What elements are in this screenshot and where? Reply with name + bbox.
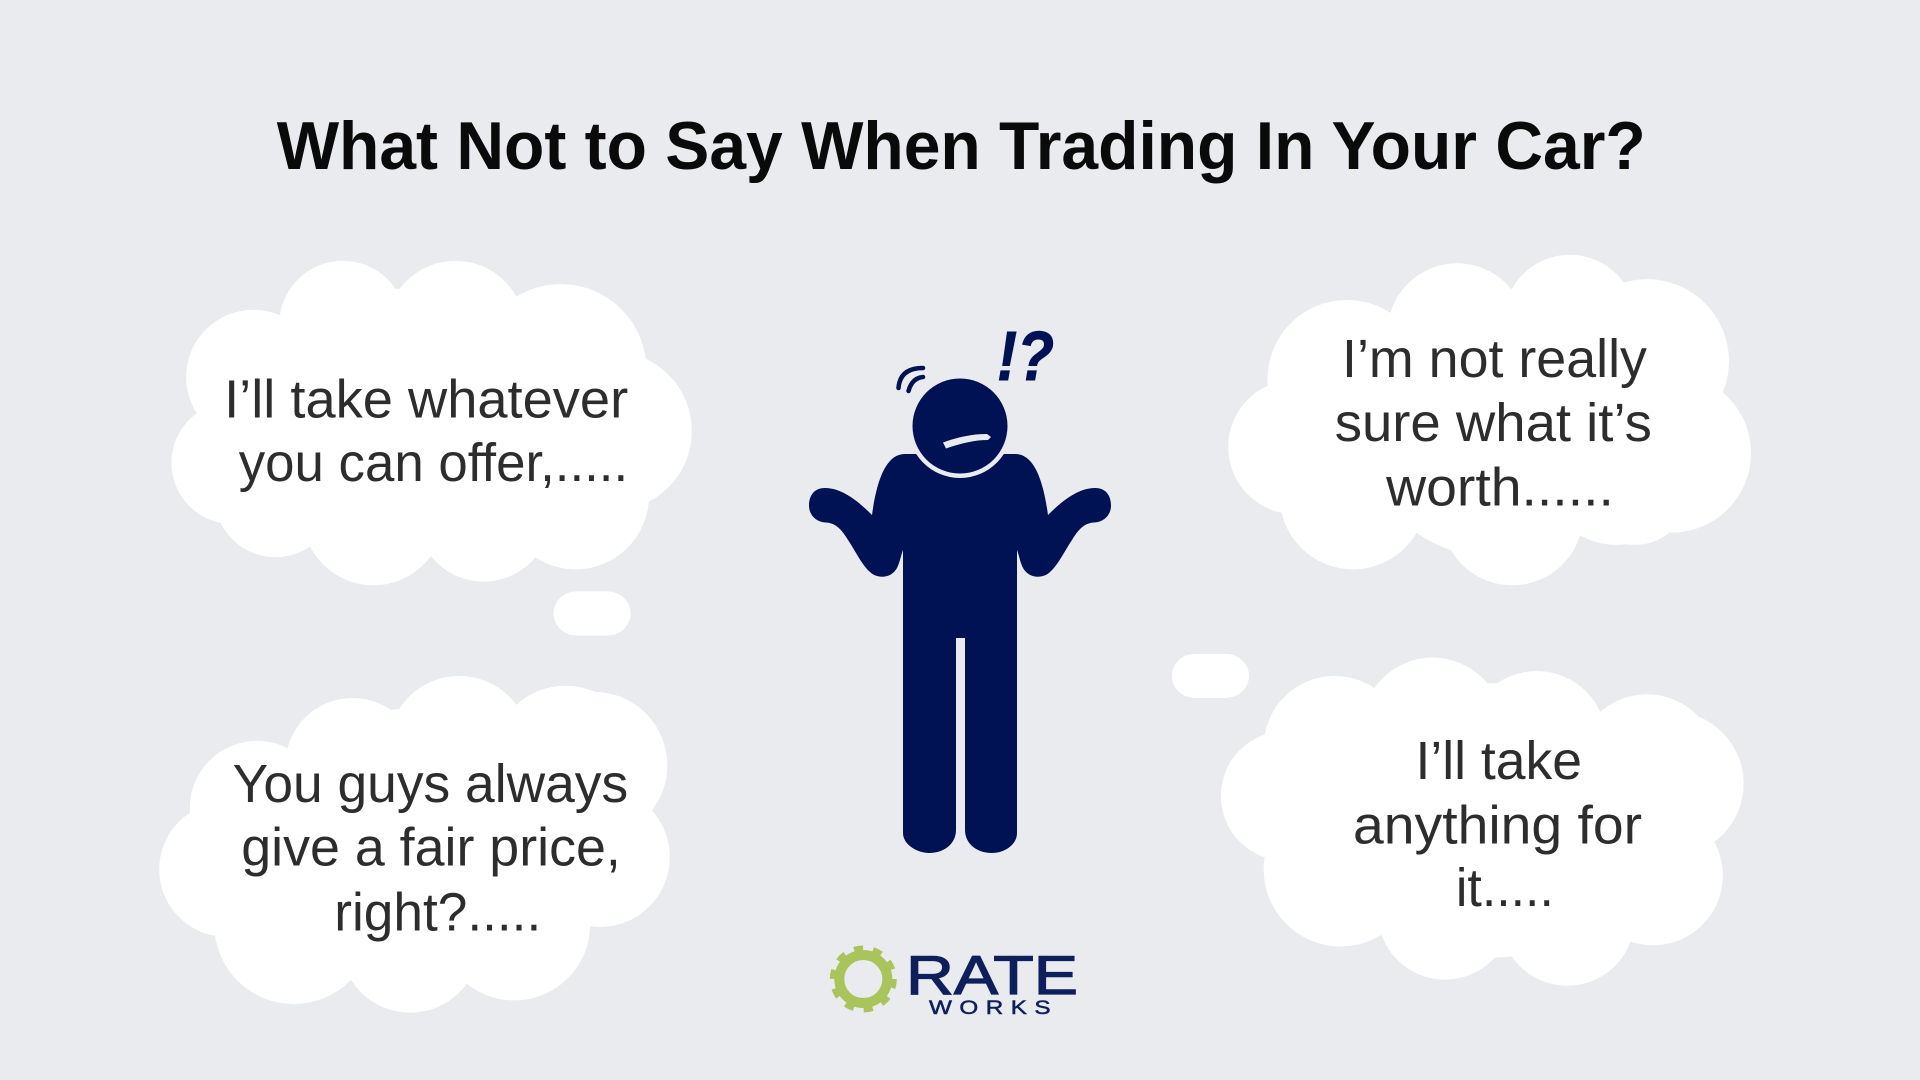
small thought bubble right xyxy=(1172,654,1249,698)
panel: thought cloud top left: you can offer,..... xyxy=(239,433,628,493)
panel: thought cloud top right xyxy=(1228,255,1751,585)
panel: thought cloud top right: I’m not really xyxy=(1342,329,1647,389)
logo: Rate Works: RATE xyxy=(906,944,1078,1006)
icon: confused shrugging person xyxy=(809,317,1111,853)
icon: green gear xyxy=(833,949,893,1009)
panel: thought cloud top left xyxy=(171,261,692,585)
panel: thought cloud bottom right: I’ll take xyxy=(1416,731,1582,791)
logo: Rate Works xyxy=(833,944,1078,1019)
panel: thought cloud bottom left: give a fair price, xyxy=(241,818,621,878)
panel: thought cloud top right: worth...... xyxy=(1385,458,1614,518)
panel: thought cloud top left: I’ll take whatever xyxy=(224,370,628,430)
title: What Not to Say When Trading In Your Car? xyxy=(277,109,1646,184)
panel: thought cloud bottom left xyxy=(159,676,670,1013)
logo: Rate Works: WORKS xyxy=(929,997,1058,1019)
small thought bubble left xyxy=(553,591,631,636)
panel: thought cloud bottom left: You guys always xyxy=(233,754,628,814)
panel: thought cloud top right: sure what it’s xyxy=(1335,393,1652,453)
panel: thought cloud bottom left: right?..... xyxy=(334,883,541,943)
icon: confused shrugging person: !? xyxy=(997,317,1054,395)
panel: thought cloud bottom right: it..... xyxy=(1456,858,1554,918)
panel: thought cloud bottom right xyxy=(1221,658,1744,986)
panel: thought cloud bottom right: anything for xyxy=(1353,796,1642,856)
